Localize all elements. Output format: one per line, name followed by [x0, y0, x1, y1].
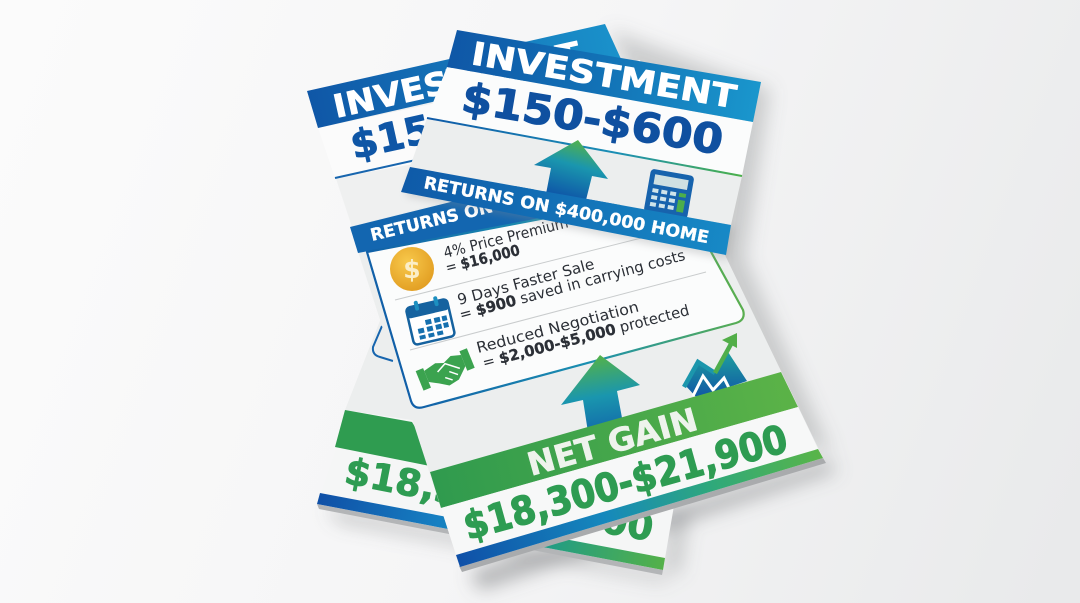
top front sheet [401, 30, 761, 260]
row 3 text: = $2,000-$5,000 protected [480, 301, 691, 372]
row dividers [395, 222, 706, 350]
back sheet net gain amount: $18,3 [341, 450, 464, 514]
back sheet green band [335, 410, 440, 468]
lower front sheet [350, 160, 826, 572]
back sheet rounded box corner [373, 326, 393, 361]
icon: calculator [644, 169, 694, 219]
net gain band [430, 372, 798, 508]
row 2 text: = $900 saved in carrying costs [457, 246, 687, 324]
back sheet grey panel [345, 318, 430, 422]
back sheet white area [318, 60, 660, 178]
white price area [427, 67, 753, 176]
icon: dollar coin [390, 247, 434, 291]
back sheet header [307, 24, 621, 128]
returns band text: RETURNS ON $400,000 HOME [368, 160, 650, 246]
row 3 text: Reduced Negotiation [474, 298, 641, 357]
back sheet price: $150 [346, 101, 462, 169]
returns band [401, 167, 731, 255]
back sheet: lower left [317, 318, 704, 575]
back sheet bottom strip [317, 493, 665, 570]
back sheet: upper left [307, 24, 700, 300]
white amount area [441, 407, 818, 555]
header text: INVESTMENT [469, 34, 739, 116]
returns panel [367, 200, 744, 408]
back sheet amount tail: 00 [598, 499, 657, 550]
icon: calendar [405, 294, 455, 345]
up arrow [534, 140, 608, 200]
row 1 text: 4% Price Premium [442, 213, 570, 262]
price range: $150-$600 [458, 74, 727, 164]
net gain amount: $18,300-$21,900 [459, 417, 793, 550]
bottom gradient strip [456, 449, 823, 567]
returns band [350, 160, 640, 253]
grey panel [410, 118, 742, 225]
row 2 text: 9 Days Faster Sale [455, 255, 596, 309]
net gain label: NET GAIN [523, 400, 702, 484]
back sheet divider line [335, 148, 470, 178]
divider line [427, 118, 742, 176]
back sheet header text: INVESTMENT [330, 34, 584, 126]
icon: dollar coin: $ [403, 255, 421, 284]
header band [447, 30, 761, 122]
row 1 text: = $16,000 [444, 241, 522, 277]
drop shadows [325, 30, 838, 590]
returns band text: RETURNS ON $400,000 HOME [422, 173, 711, 248]
icon: handshake [415, 348, 477, 395]
large up arrow [561, 355, 640, 458]
icon: growth chart [684, 333, 747, 398]
